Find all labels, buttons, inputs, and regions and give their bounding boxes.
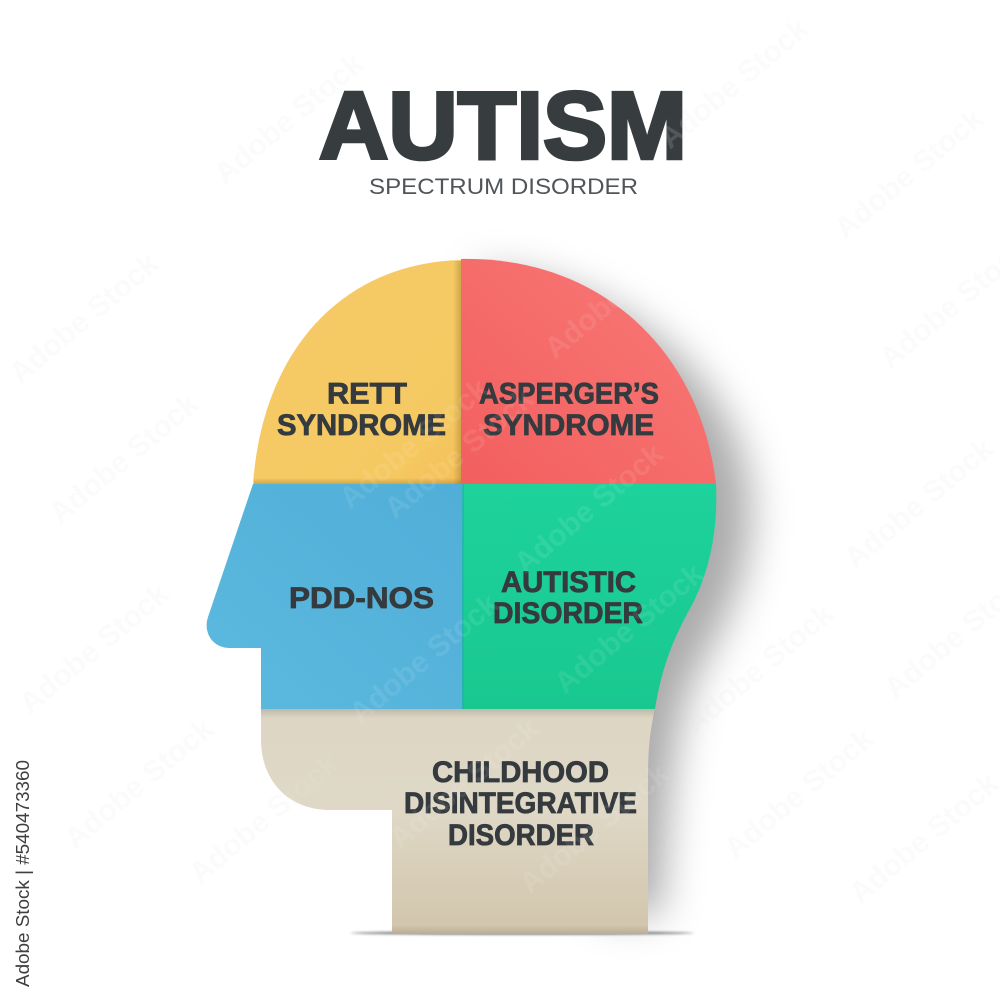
watermark pattern: Adobe Stock [653,12,815,155]
panel: PDD-NOS [207,484,462,709]
watermark pattern: Adobe Stock [13,577,175,720]
watermark pattern: Adobe Stock [828,102,990,245]
watermark pattern: Adobe Stock [183,747,345,890]
title: AUTISM [319,72,687,180]
watermark pattern: Adobe Stock [3,247,165,390]
soft drop shadow behind head [470,272,751,915]
watermark pattern: Adobe Stock [718,722,880,865]
label: Rett syndrome: RETT [327,378,407,410]
watermark pattern: Adobe Stock [43,387,205,530]
watermark pattern: Adobe Stock [58,712,220,855]
watermark pattern: Adobe Stock [378,382,540,525]
watermark pattern: Adobe Stock [838,432,1000,575]
watermark pattern: Adobe Stock [508,437,670,580]
stock id side text: Adobe Stock | #540473360 [13,760,33,987]
label: Childhood disintegrative disorder: CHILDHOOD [432,756,609,789]
label: PDD-NOS: PDD-NOS [289,582,434,615]
label: Rett syndrome: SYNDROME [277,409,446,442]
label: Asperger's syndrome: ASPERGER’S [479,378,659,410]
panel: Rett syndrome [253,260,461,484]
watermark pattern: Adobe Stock [208,47,370,190]
label: Childhood disintegrative disorder: DISORDER [448,819,594,852]
watermark pattern: Adobe Stock [343,587,505,730]
label: Childhood disintegrative disorder: DISINTEGRATIVE [404,787,637,820]
watermark pattern: Adobe Stock [548,557,710,700]
panel: Childhood disintegrative disorder [261,709,655,934]
ground shadow under neck [350,931,694,935]
watermark pattern: Adobe Stock [538,222,700,365]
head diagram [207,259,716,934]
label: Rett syndrome [277,378,446,442]
watermark pattern: Adobe Stock [678,597,840,740]
watermark pattern: Adobe Stock [333,372,495,515]
panel: Autistic disorder [462,484,716,709]
subtitle: SPECTRUM DISORDER [369,174,638,199]
label: Childhood disintegrative disorder [404,756,637,852]
watermark pattern: Adobe Stock [513,757,675,900]
label: Autistic disorder [493,566,643,630]
panel: Asperger's syndrome [461,259,716,484]
label: Asperger's syndrome [479,378,659,442]
watermark pattern: Adobe Stock [383,712,545,855]
label: Autistic disorder: DISORDER [493,597,643,630]
label: Asperger's syndrome: SYNDROME [483,409,654,442]
label: Autistic disorder: AUTISTIC [501,566,636,599]
